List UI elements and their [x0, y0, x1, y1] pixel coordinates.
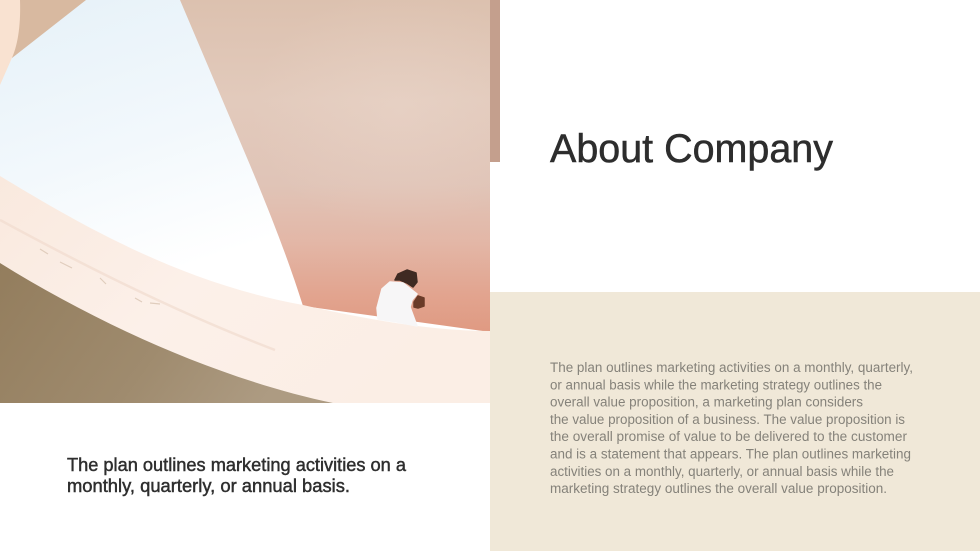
- subtitle: [67, 455, 407, 496]
- body paragraph: the value proposition of a business. The value proposition is: [550, 412, 905, 427]
- upper left overhang: [12, 0, 86, 58]
- body paragraph: and is a statement that appears. The plan outlines marketing: [550, 446, 911, 462]
- body paragraph: activities on a monthly, quarterly, or annual basis while the: [550, 464, 894, 479]
- beige text panel: [490, 292, 980, 551]
- curved white balcony: [0, 176, 490, 403]
- body paragraph: [550, 360, 913, 496]
- title: About Company: [550, 127, 833, 171]
- subtitle: The plan outlines marketing activities on a: [67, 455, 407, 475]
- sky: [0, 0, 246, 216]
- photo: architecture with person: [0, 0, 490, 403]
- body paragraph: marketing strategy outlines the overall value proposition.: [550, 481, 887, 496]
- arm: [414, 296, 424, 308]
- person: [377, 270, 424, 326]
- subtitle: monthly, quarterly, or annual basis.: [67, 476, 350, 496]
- upper left column: [0, 0, 20, 85]
- head: [395, 270, 417, 287]
- body paragraph: or annual basis while the marketing strategy outlines the: [550, 377, 882, 392]
- balcony crease: [0, 220, 275, 350]
- balcony stains: [40, 249, 160, 304]
- concrete underside: [0, 263, 333, 403]
- body paragraph: overall value proposition, a marketing plan considers: [550, 395, 863, 410]
- shirt: [377, 282, 417, 326]
- body paragraph: the overall promise of value to be delivered to the customer: [550, 429, 907, 444]
- body paragraph: The plan outlines marketing activities on a monthly, quarterly,: [550, 360, 913, 375]
- accent tab behind photo: [490, 0, 500, 162]
- pink wall: [180, 0, 490, 331]
